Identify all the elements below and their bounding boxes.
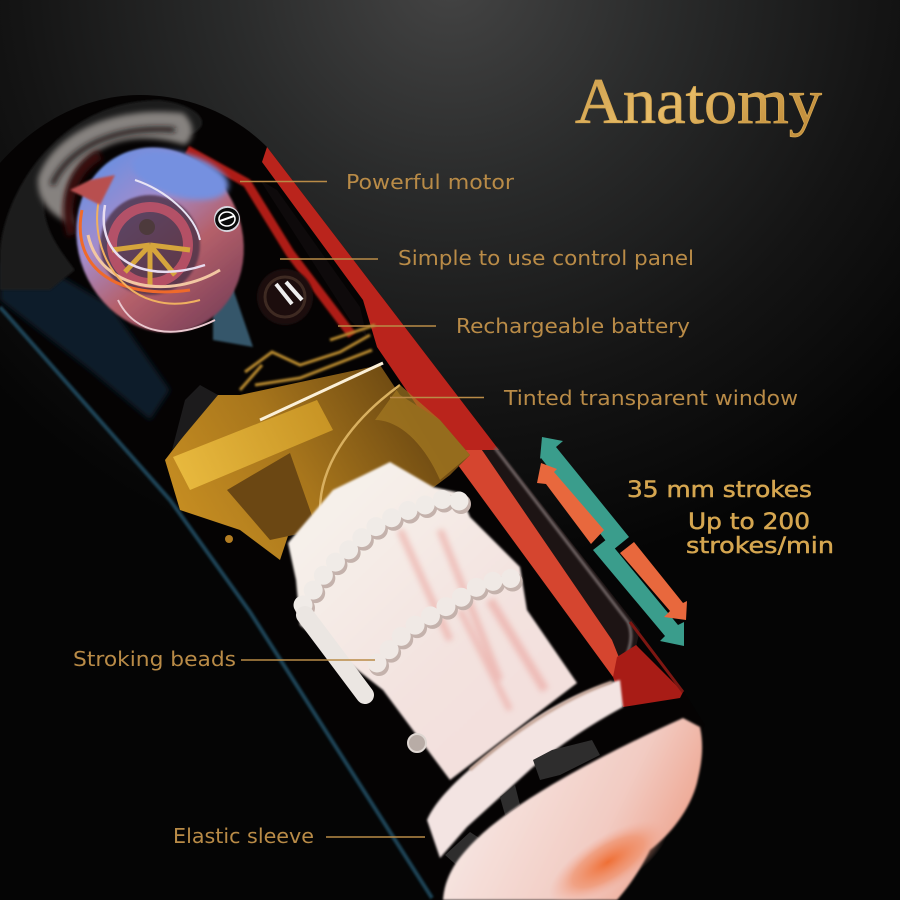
stroke specifications <box>627 478 834 559</box>
arrow: orange down <box>620 542 687 620</box>
text: stroke rate line 1: Up to 200 <box>688 510 810 535</box>
blue left edge <box>0 307 432 898</box>
stroking sleeve with beads <box>288 462 577 780</box>
arrow: orange up <box>537 463 604 544</box>
coral shell band <box>447 450 640 677</box>
red inner band <box>187 150 352 335</box>
label: control panel: Simple to use control panel <box>398 246 694 270</box>
glass window <box>482 450 640 665</box>
lens ring <box>0 100 202 290</box>
blue reflection upper left <box>0 262 170 420</box>
arrow: teal up <box>540 437 629 550</box>
black clip details <box>445 740 600 870</box>
outer edge highlight <box>630 622 683 692</box>
arrow: teal down <box>593 539 684 646</box>
product: transparent device cutaway <box>0 95 705 900</box>
icon: mode button <box>257 269 313 325</box>
bead ring lower <box>377 577 520 663</box>
motor <box>49 122 271 358</box>
bead ring upper <box>303 497 468 605</box>
blue panel behind motor <box>213 280 253 347</box>
icon: power button <box>212 205 242 233</box>
text: stroke rate line 2: strokes/min <box>686 534 834 559</box>
text: stroke length: 35 mm strokes <box>627 478 812 503</box>
pink end cap <box>443 718 702 900</box>
gold debris above window <box>240 325 375 390</box>
label: rechargeable battery: Rechargeable battery <box>456 314 690 338</box>
label: stroking beads: Stroking beads <box>73 647 236 671</box>
screw detail <box>408 734 426 752</box>
arrows: stroke direction <box>537 437 687 646</box>
label: tinted window: Tinted transparent window <box>503 386 798 410</box>
dark red lower shell <box>613 645 683 707</box>
gold dot <box>225 535 233 543</box>
device body <box>0 95 705 900</box>
label: elastic sleeve: Elastic sleeve <box>173 824 314 848</box>
gold tinted window <box>165 363 470 560</box>
dark window strip in shell <box>260 180 367 337</box>
title: Anatomy <box>575 66 822 138</box>
pink collar <box>427 680 623 858</box>
label: powerful motor: Powerful motor <box>346 170 515 194</box>
glass highlight <box>495 448 631 664</box>
outer red shell <box>262 147 499 450</box>
bead shadows <box>305 500 522 666</box>
